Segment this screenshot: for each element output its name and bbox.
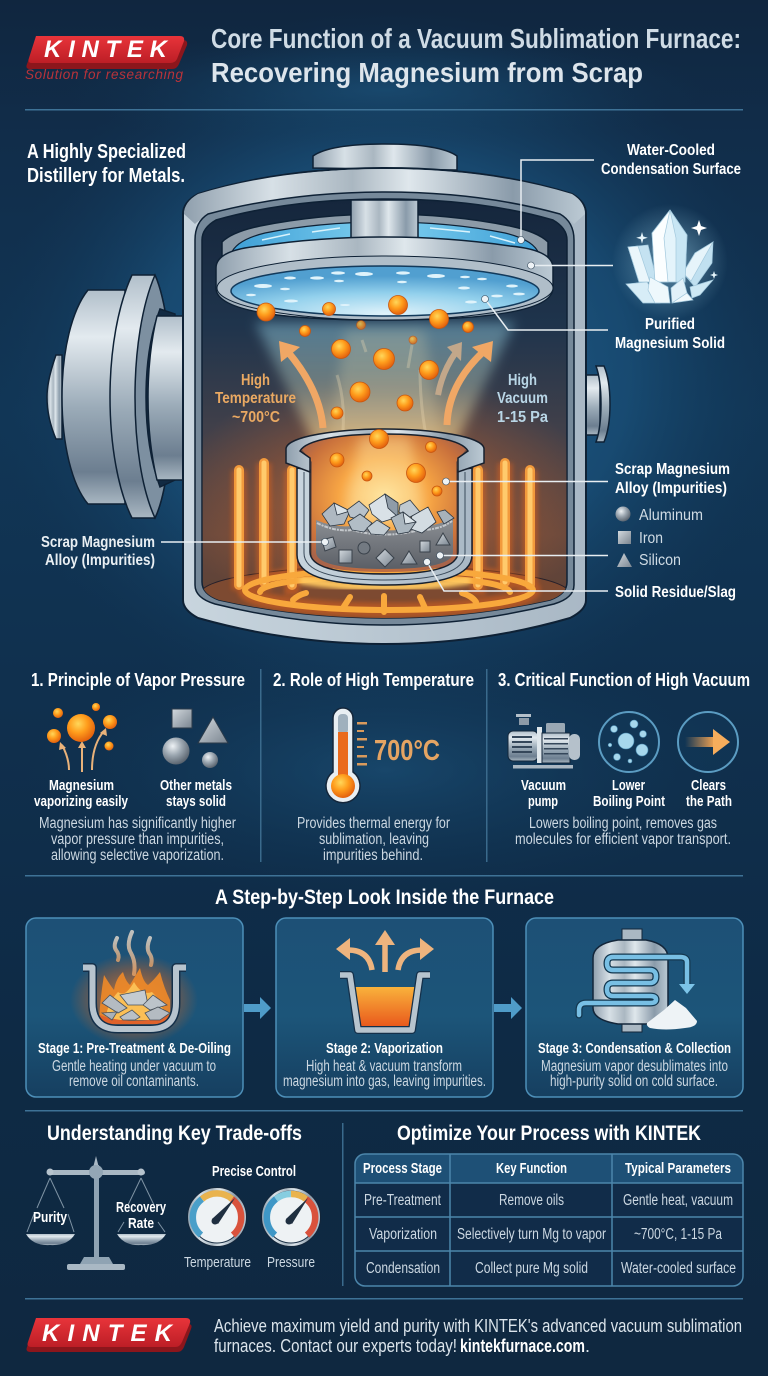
card: stage 2 bbox=[276, 918, 493, 1097]
heading: 1. Principle of Vapor Pressure bbox=[31, 670, 245, 690]
callout: water-cooled surface: Condensation Surface bbox=[601, 161, 741, 178]
callout: scrap alloy right with legend: Alloy (Impurities) bbox=[615, 480, 727, 497]
callout: purified magnesium: Magnesium Solid bbox=[615, 335, 725, 352]
callout: scrap alloy right with legend bbox=[615, 461, 730, 569]
callout: scrap alloy left: Scrap Magnesium bbox=[41, 534, 155, 551]
left port bbox=[47, 275, 183, 518]
condensation plate bbox=[216, 237, 553, 320]
icon: clears the path bbox=[678, 712, 738, 772]
panel: high vacuum bbox=[498, 670, 750, 848]
icon: crucible with flames bbox=[70, 932, 198, 1046]
logo: KINTEK header: Solution for researching bbox=[25, 67, 183, 82]
table: Selectively turn Mg to vapor bbox=[457, 1226, 606, 1243]
logo: KINTEK footer: KINTEK bbox=[42, 1320, 174, 1347]
heating elements bbox=[239, 463, 533, 610]
table: Process Stage bbox=[363, 1160, 442, 1177]
callout: scrap alloy right with legend: Silicon bbox=[639, 552, 681, 569]
panel: trade-offs bbox=[26, 1122, 320, 1271]
panel: trade-offs: Rate bbox=[128, 1216, 154, 1232]
section heading: step by step: A Step-by-Step Look Inside the Furnace bbox=[215, 886, 554, 909]
heading: Understanding Key Trade-offs bbox=[47, 1122, 302, 1145]
slag layer bbox=[316, 517, 453, 569]
callout: scrap alloy right with legend: Iron bbox=[639, 530, 663, 547]
table: Condensation bbox=[366, 1260, 440, 1277]
icon: condenser with powder bbox=[579, 929, 697, 1032]
icon: magnesium vaporizing bbox=[47, 703, 117, 772]
table: Collect pure Mg solid bbox=[475, 1260, 588, 1277]
callout: purified magnesium bbox=[615, 316, 725, 352]
panel: high vacuum: Boiling Point bbox=[593, 794, 665, 810]
card: stage 1: Stage 1: Pre-Treatment & De-Oiling bbox=[38, 1041, 231, 1057]
table: Key Function bbox=[496, 1160, 567, 1177]
footer call to action: furnaces. Contact our experts today! bbox=[214, 1336, 457, 1356]
crucible bbox=[286, 429, 484, 585]
footer call to action bbox=[214, 1316, 742, 1356]
arrow: stage 1 to 2 bbox=[244, 997, 271, 1019]
callout: solid residue: Solid Residue/Slag bbox=[615, 584, 736, 601]
logo: KINTEK header bbox=[25, 36, 187, 82]
leader lines bbox=[161, 160, 613, 591]
logo: KINTEK header: KINTEK bbox=[44, 36, 169, 63]
icon: vacuum pump bbox=[508, 714, 580, 768]
leader dots bbox=[322, 236, 534, 566]
furnace diagram bbox=[47, 144, 613, 644]
icon: thermometer bbox=[326, 708, 367, 803]
panel: trade-offs: Recovery bbox=[116, 1200, 166, 1216]
icon: temperature gauge bbox=[188, 1188, 246, 1246]
panel: vapor pressure: Magnesium bbox=[49, 778, 114, 794]
panel: trade-offs: Temperature bbox=[184, 1254, 251, 1271]
panel: trade-offs: Precise Control bbox=[212, 1164, 296, 1180]
panel: high temperature bbox=[273, 670, 474, 864]
icon: other metals bbox=[162, 709, 228, 768]
table: Pre-Treatment bbox=[364, 1192, 442, 1209]
table: Vaporization bbox=[369, 1226, 437, 1243]
panel: optimize bbox=[355, 1122, 743, 1286]
callout: water-cooled surface bbox=[601, 142, 741, 178]
heading: Optimize Your Process with KINTEK bbox=[397, 1122, 701, 1145]
subtitle: distillery bbox=[27, 141, 186, 187]
card: stage 3 bbox=[526, 918, 743, 1097]
condenser column bbox=[351, 200, 418, 238]
panel: high vacuum: pump bbox=[528, 794, 558, 810]
card: stage 2: Stage 2: Vaporization bbox=[326, 1041, 443, 1057]
crucible wall bbox=[297, 468, 472, 585]
label: high vacuum: 1-15 Pa bbox=[497, 409, 548, 426]
icon: magnesium crystal bbox=[612, 204, 728, 320]
card: stage 2: High heat & vacuum transform bbox=[306, 1058, 462, 1075]
callout: scrap alloy right with legend: Scrap Magnesium bbox=[615, 461, 730, 478]
label: high temperature: ~700°C bbox=[232, 409, 280, 426]
impurity shapes bbox=[322, 533, 450, 567]
panel: trade-offs: Pressure bbox=[267, 1254, 315, 1271]
callout: purified magnesium: Purified bbox=[645, 316, 695, 333]
table: Gentle heat, vacuum bbox=[623, 1192, 733, 1209]
scrap crystals bbox=[322, 494, 454, 535]
panel: vapor pressure: stays solid bbox=[166, 794, 226, 810]
card: stage 3: high-purity solid on cold surface. bbox=[550, 1073, 718, 1090]
furnace body bbox=[183, 168, 586, 644]
panel: vapor pressure: Magnesium has significantly higher bbox=[39, 815, 236, 832]
card: stage 1: Gentle heating under vacuum to bbox=[52, 1058, 216, 1075]
table: ~700°C, 1-15 Pa bbox=[634, 1226, 722, 1243]
card: stage 1 bbox=[26, 918, 243, 1097]
subtitle: distillery: A Highly Specialized bbox=[27, 141, 186, 163]
table: Remove oils bbox=[499, 1192, 564, 1209]
icon: lower boiling point bbox=[599, 712, 659, 772]
card: stage 2: magnesium into gas, leaving impurities. bbox=[283, 1073, 486, 1090]
panel: high temperature: impurities behind. bbox=[323, 847, 423, 864]
panel: vapor pressure: vaporizing easily bbox=[34, 794, 128, 810]
label: high temperature: Temperature bbox=[215, 390, 296, 407]
title: Recovering Magnesium from Scrap bbox=[211, 57, 643, 88]
panel: high vacuum: Clears bbox=[691, 778, 726, 794]
icon: cup with vapor bbox=[336, 930, 434, 1030]
icon: pressure gauge bbox=[262, 1188, 320, 1246]
furnace floor bbox=[201, 566, 569, 620]
panel: high vacuum: the Path bbox=[686, 794, 732, 810]
heading: 2. Role of High Temperature bbox=[273, 670, 474, 690]
footer call to action: . bbox=[585, 1336, 590, 1356]
icon: balance scale bbox=[26, 1156, 166, 1270]
panel: high vacuum: Vacuum bbox=[521, 778, 566, 794]
callout: scrap alloy right with legend: Aluminum bbox=[639, 507, 703, 524]
panel: high temperature: 700°C bbox=[374, 735, 440, 767]
panel: high temperature: sublimation, leaving bbox=[319, 831, 429, 848]
arrow: stage 2 to 3 bbox=[494, 997, 522, 1019]
label: high vacuum bbox=[497, 372, 548, 426]
table: Water-cooled surface bbox=[621, 1260, 736, 1277]
panel: vapor pressure: allowing selective vaporization. bbox=[51, 847, 224, 864]
top knob bbox=[313, 144, 457, 170]
vapor arrows bbox=[279, 340, 493, 430]
furnace lid bbox=[184, 169, 585, 224]
right port bbox=[584, 366, 610, 442]
card: stage 1: remove oil contaminants. bbox=[69, 1073, 199, 1090]
table: Typical Parameters bbox=[625, 1160, 731, 1177]
magnesium vapor droplets bbox=[257, 296, 474, 496]
footer call to action: kintekfurnace.com bbox=[460, 1336, 585, 1356]
panel: vapor pressure: Other metals bbox=[160, 778, 232, 794]
panel: vapor pressure: vapor pressure than impurities, bbox=[51, 831, 224, 848]
title bbox=[211, 23, 741, 88]
label: high temperature bbox=[215, 372, 296, 426]
panel: vapor pressure bbox=[31, 670, 245, 864]
panel: trade-offs: Purity bbox=[33, 1210, 67, 1226]
crucible rim bbox=[286, 429, 484, 472]
label: high vacuum: High bbox=[508, 372, 537, 389]
water-cooled condensation surface bbox=[222, 214, 548, 258]
panel: high vacuum: Lowers boiling point, removes gas bbox=[529, 815, 717, 832]
logo: KINTEK footer bbox=[26, 1318, 192, 1352]
panel: high vacuum: Lower bbox=[612, 778, 645, 794]
table bbox=[355, 1154, 743, 1286]
callout: scrap alloy left bbox=[41, 534, 155, 569]
subtitle: distillery: Distillery for Metals. bbox=[27, 165, 185, 187]
chamber interior bbox=[175, 192, 595, 630]
panel: high temperature: Provides thermal energy for bbox=[297, 815, 450, 832]
callout: water-cooled surface: Water-Cooled bbox=[627, 142, 715, 159]
label: high vacuum: Vacuum bbox=[497, 390, 548, 407]
callout: scrap alloy left: Alloy (Impurities) bbox=[45, 552, 155, 569]
label: high temperature: High bbox=[241, 372, 270, 389]
